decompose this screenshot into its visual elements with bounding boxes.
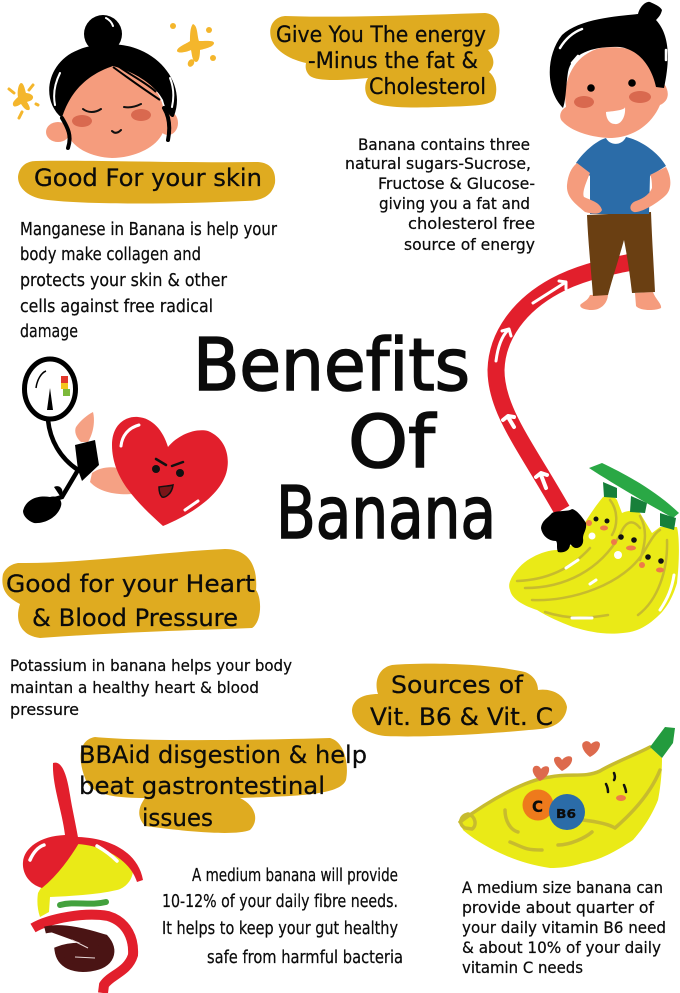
- heading blob: energy: Cholesterol: [369, 75, 486, 100]
- text block: skin benefit: damage: [20, 321, 78, 342]
- icon: banana with vitamins: C: [532, 797, 543, 816]
- icon: sparkle small: [9, 83, 38, 118]
- heart: [112, 417, 228, 526]
- red tube with arrows: [496, 262, 632, 510]
- heading blob: heart: Good for your Heart: [6, 570, 255, 598]
- arm: [90, 467, 132, 494]
- text block: skin benefit: body make collagen and: [20, 244, 201, 265]
- boy hair: [550, 2, 668, 108]
- text block: vitamin benefit: A medium size banana can: [462, 878, 663, 897]
- icon: girl face: [9, 15, 216, 158]
- icon: banana bunch: [509, 463, 679, 634]
- boy trousers: [587, 212, 655, 296]
- text block: vitamin benefit: provide about quarter of: [462, 898, 654, 917]
- stem: [589, 463, 679, 518]
- text block: heart benefit: [10, 656, 292, 719]
- title: Benefits: [193, 323, 470, 407]
- text block: energy benefit: Banana contains three: [358, 135, 530, 154]
- arrows on tube: [496, 274, 623, 488]
- text block: skin benefit: protects your skin & other: [20, 270, 228, 291]
- fist: [75, 412, 94, 442]
- heading blob: heart: [2, 549, 260, 638]
- text block: skin benefit: [20, 219, 277, 342]
- text block: energy benefit: [345, 135, 535, 254]
- text block: vitamin benefit: & about 10% of your daily: [462, 938, 661, 957]
- text block: heart benefit: maintan a healthy heart & blood: [10, 678, 259, 697]
- title: Of: [348, 400, 437, 484]
- icon: banana with vitamins: B6: [556, 807, 576, 821]
- boy shirt: [576, 137, 666, 214]
- text block: digestion benefit: [162, 865, 403, 968]
- heading blob: energy: Give You The energy: [276, 23, 486, 48]
- heading blob: good for your skin: Good For your skin: [34, 164, 262, 192]
- text block: digestion benefit: safe from harmful bacteria: [207, 947, 403, 968]
- heading blob: digestion: BBAid disgestion & help: [79, 741, 367, 769]
- text block: digestion benefit: 10-12% of your daily fibre needs.: [162, 891, 398, 912]
- text block: energy benefit: giving you a fat and: [379, 194, 530, 213]
- text block: vitamin benefit: your daily vitamin B6 need: [462, 918, 666, 937]
- boy head: [560, 47, 668, 138]
- icon: blood pressure gauge and heart: [23, 359, 228, 526]
- icon: boy character: [550, 2, 670, 310]
- icon: digestive system: [23, 763, 143, 993]
- boy feet: [580, 292, 661, 310]
- title: [193, 323, 496, 555]
- heading blob: digestion: beat gastrontestinal: [79, 772, 325, 800]
- icon: sparkle large: [170, 23, 216, 68]
- text block: energy benefit: natural sugars-Sucrose,: [345, 154, 531, 173]
- text block: energy benefit: Fructose & Glucose-: [378, 174, 535, 193]
- title: Banana: [276, 471, 496, 555]
- text block: vitamin benefit: vitamin C needs: [462, 958, 583, 977]
- heading blob: energy: [270, 13, 499, 107]
- text block: skin benefit: Manganese in Banana is help your: [20, 219, 277, 240]
- heading blob: digestion: issues: [142, 804, 213, 832]
- text block: skin benefit: cells against free radical: [20, 296, 213, 317]
- text block: energy benefit: cholesterol free: [408, 214, 535, 233]
- stomach red and oesophagus: [23, 763, 143, 888]
- heading blob: vitamins: [352, 664, 567, 736]
- text block: heart benefit: pressure: [10, 700, 79, 719]
- hearts: [533, 741, 600, 781]
- bananas: [509, 496, 679, 634]
- text block: vitamin benefit: [462, 878, 666, 977]
- text block: heart benefit: Potassium in banana helps your body: [10, 656, 292, 675]
- boy arms: [567, 163, 670, 214]
- icon: banana with vitamins: [460, 727, 675, 868]
- gauge: [23, 359, 78, 523]
- stomach yellow: [37, 838, 133, 917]
- icon: black hand gripping tube: [541, 509, 586, 552]
- heading blob: vitamins: Sources of: [391, 671, 524, 699]
- cuff: [75, 440, 99, 481]
- heading blob: heart: & Blood Pressure: [32, 604, 238, 632]
- text block: digestion benefit: It helps to keep your gut healthy: [162, 918, 398, 939]
- small intestine: [45, 929, 111, 968]
- text block: energy benefit: source of energy: [404, 235, 535, 254]
- heading blob: digestion: [79, 737, 367, 833]
- text block: digestion benefit: A medium banana will provide: [192, 865, 398, 886]
- heading blob: vitamins: Vit. B6 & Vit. C: [370, 703, 553, 731]
- green tract: [60, 902, 106, 905]
- heading blob: energy: -Minus the fat &: [308, 49, 478, 74]
- large intestine: [33, 915, 133, 993]
- heading blob: good for your skin: [18, 161, 275, 204]
